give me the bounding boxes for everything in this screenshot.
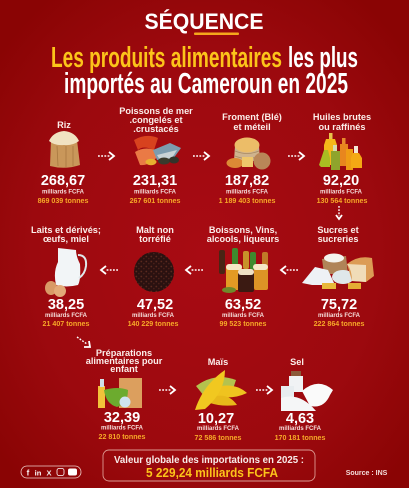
icon: milk jug and eggs — [45, 248, 86, 297]
item: Boissons: 63,52 — [225, 297, 261, 313]
item: Sel: 4,63 — [286, 411, 314, 427]
item: Riz: 268,67 — [41, 173, 85, 189]
item: Maïs: 72 586 tonnes — [195, 434, 242, 442]
icon: oil bottles — [319, 133, 362, 170]
icon: baby food — [98, 378, 142, 408]
title — [51, 42, 358, 100]
item: Poissons de mer: .crustacés — [133, 124, 179, 134]
item: Froment: 187,82 — [225, 173, 269, 189]
arrow — [159, 386, 175, 394]
item: Froment — [219, 112, 282, 205]
icon: rice sack — [49, 131, 80, 168]
icon: wheat and flour — [226, 138, 270, 170]
item: Huiles: Huiles brutes — [313, 112, 371, 122]
item: Préparations: 22 810 tonnes — [99, 433, 146, 441]
total value box: 5 229,24 milliards FCFA — [146, 465, 279, 480]
item: Sucres: 75,72 — [321, 297, 357, 313]
logo: Séquence: SÉQUENCE — [144, 9, 264, 34]
item: Sucres: milliards FCFA — [318, 313, 361, 319]
item: Laits: œufs, miel — [43, 234, 89, 244]
item: Froment: milliards FCFA — [226, 190, 269, 196]
item: Froment: Froment (Blé) — [222, 112, 282, 122]
item: Huiles: 92,20 — [323, 173, 359, 189]
total value box — [103, 450, 315, 481]
social media icons — [21, 466, 81, 478]
item: Malt: milliards FCFA — [132, 313, 175, 319]
icon: sugar and bread — [302, 254, 374, 289]
item: Malt: 140 229 tonnes — [128, 320, 178, 328]
item: Maïs: Maïs — [208, 357, 228, 367]
item: Boissons: alcools, liqueurs — [207, 234, 279, 244]
arrow — [186, 266, 203, 274]
item: Poissons de mer: 267 601 tonnes — [130, 197, 180, 205]
item: Sel — [275, 357, 333, 442]
social media icons: f — [27, 468, 30, 478]
icon: beer bottles and mugs — [219, 248, 268, 293]
item: Sucres — [302, 225, 374, 328]
item: Froment: et méteil — [233, 122, 271, 132]
icon: salt — [281, 371, 333, 411]
item: Boissons: milliards FCFA — [222, 313, 265, 319]
item: Riz: Riz — [57, 120, 71, 130]
arrow — [77, 337, 90, 347]
item: Préparations: milliards FCFA — [101, 426, 144, 432]
item: Laits: Laits et dérivés; — [31, 225, 101, 235]
item: Maïs: 10,27 — [198, 411, 234, 427]
item: Poissons de mer: .congelés et — [129, 115, 183, 125]
item: Préparations: 32,39 — [104, 410, 140, 426]
item: Malt: 47,52 — [137, 297, 173, 313]
item: Maïs: milliards FCFA — [197, 426, 240, 432]
item: Maïs — [195, 357, 247, 442]
item: Boissons: Boissons, Vins, — [209, 225, 277, 235]
item: Riz — [38, 120, 88, 205]
total value box: Valeur globale des importations en 2025 : — [114, 455, 304, 466]
title: Les produits alimentaires — [51, 42, 282, 74]
item: Préparations: enfant — [110, 364, 138, 374]
arrow — [288, 152, 304, 160]
item: Poissons de mer: milliards FCFA — [134, 190, 177, 196]
item: Boissons: 99 523 tonnes — [220, 320, 267, 328]
arrow — [98, 152, 114, 160]
icon: malt pile — [134, 252, 174, 292]
item: Poissons de mer: 231,31 — [133, 173, 177, 189]
item: Malt — [128, 225, 178, 328]
item: Riz: milliards FCFA — [42, 190, 85, 196]
item: Laits: 21 407 tonnes — [43, 320, 90, 328]
arrow — [256, 386, 272, 394]
item: Préparations — [86, 348, 163, 441]
item: Huiles: ou raffinés — [319, 122, 365, 132]
item: Huiles — [313, 112, 371, 205]
item: Laits: milliards FCFA — [45, 313, 88, 319]
item: Préparations: Préparations — [96, 348, 152, 358]
social media icons: in — [35, 468, 42, 478]
item: Laits — [31, 225, 101, 328]
item: Riz: 869 039 tonnes — [38, 197, 88, 205]
item: Malt: Malt non — [136, 225, 174, 235]
title: les plus — [288, 42, 358, 74]
item: Préparations: alimentaires pour — [86, 356, 163, 366]
item: Huiles: milliards FCFA — [320, 190, 363, 196]
arrow — [101, 266, 118, 274]
arrow — [193, 152, 209, 160]
item: Sucres: sucreries — [318, 234, 358, 244]
item: Poissons de mer: Poissons de mer — [119, 106, 193, 116]
item: Malt: torréfié — [139, 234, 171, 244]
item: Sel: Sel — [290, 357, 304, 367]
icon: fish and shellfish — [134, 136, 181, 165]
item: Boissons — [207, 225, 279, 328]
icon: corn — [195, 370, 247, 410]
item: Sucres: Sucres et — [317, 225, 359, 235]
social media icons: X — [46, 468, 52, 478]
item: Sucres: 222 864 tonnes — [314, 320, 364, 328]
item: Huiles: 130 564 tonnes — [317, 197, 367, 205]
arrow — [281, 266, 298, 274]
item: Sel: milliards FCFA — [279, 426, 322, 432]
item: Poissons de mer — [119, 106, 193, 205]
item: Sel: 170 181 tonnes — [275, 434, 325, 442]
arrow — [336, 206, 342, 219]
item: Froment: 1 189 403 tonnes — [219, 197, 275, 205]
source: Source : INS — [346, 470, 388, 477]
item: Laits: 38,25 — [48, 297, 84, 313]
